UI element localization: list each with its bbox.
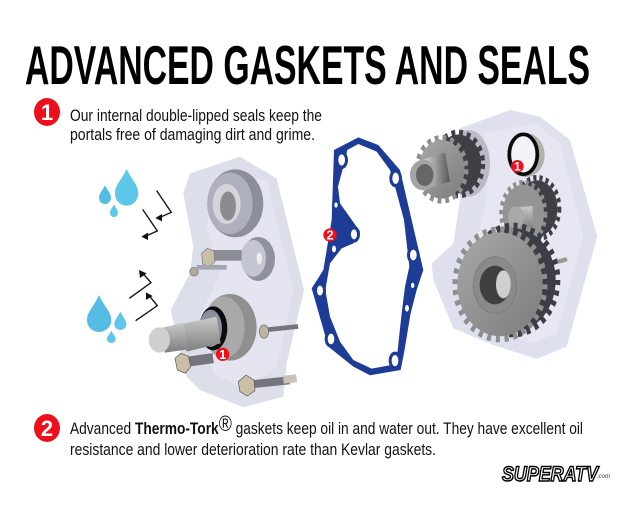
seal marker 1: 1 [219,348,226,362]
top gear [410,130,490,201]
text block 1: portals free of damaging dirt and grime. [70,125,315,144]
seal: 1 [514,160,521,174]
gasket marker 2: 2 [326,229,334,243]
text block 2: Advanced Thermo-Tork [70,419,239,438]
left portal housing [149,157,304,407]
upper bearing hub [207,169,263,237]
logo: .com [597,474,610,480]
callout 1 [34,98,322,144]
seal marker 1 [216,348,229,362]
seal [507,133,545,177]
text block 2: resistance and lower deterioration rate than Kevlar gaskets. [70,440,436,459]
badge 1 [34,98,60,126]
drop group lower [87,295,126,343]
callout 2 [34,411,583,459]
lower bolts [175,324,298,396]
drop group upper [99,169,138,217]
badge 2: 2 [41,416,53,441]
text block 1 [70,106,322,144]
lower gear hub [199,294,257,361]
text block 1: Our internal double-lipped seals keep the [70,106,322,125]
arrows [129,191,171,321]
middle gear [501,178,559,244]
housing body [171,157,304,407]
badge 2 [34,414,60,442]
text block 2 [70,411,583,459]
water drops and arrows [87,169,171,343]
gasket marker 2 [323,228,337,243]
middle bearing hub [241,237,275,281]
gasket [312,137,423,375]
large gear [455,226,558,339]
right portal housing with gears [410,110,597,359]
logo: SUPERATV [502,463,600,486]
text block 2: ® [219,411,232,436]
upper bolt [190,248,242,276]
output shaft [149,317,221,353]
small dowel pin [557,257,568,264]
housing body [432,110,597,359]
badge 1: 1 [41,100,53,125]
